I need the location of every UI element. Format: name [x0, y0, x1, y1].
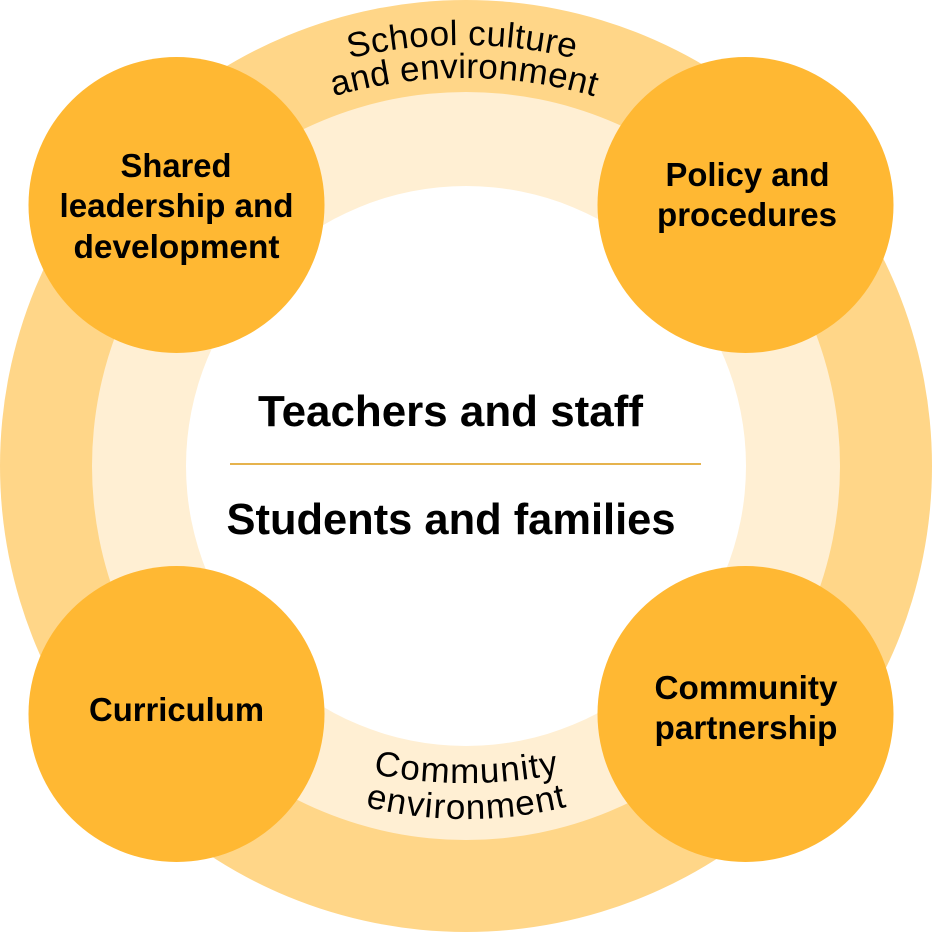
- middle ring label: Community: [376, 752, 556, 784]
- centre heading: teachers and staff: Teachers and staff: [258, 387, 643, 436]
- middle ring label: environment: [368, 786, 566, 820]
- circle: community partnership: Community: [654, 669, 838, 706]
- circle: curriculum: [28, 566, 324, 862]
- circle: policy and procedures: procedures: [657, 196, 837, 233]
- circle: community partnership: partnership: [654, 709, 838, 746]
- outer ring label: School culture: [348, 20, 576, 57]
- circle: policy and procedures: Policy and: [666, 156, 830, 193]
- circle: community partnership: [598, 566, 894, 862]
- middle ring label: [368, 752, 566, 820]
- circle: shared leadership and development: Shared: [120, 147, 232, 184]
- centre heading: students and families: Students and families: [226, 495, 676, 544]
- outer ring label: and environment: [332, 52, 599, 96]
- outer ring label: [332, 20, 599, 96]
- circle: shared leadership and development: leadership and: [60, 187, 294, 224]
- circle: curriculum: Curriculum: [89, 691, 264, 728]
- middle ring: community environment: [92, 92, 840, 840]
- circle: shared leadership and development: development: [74, 228, 280, 265]
- inner circle: centre: [186, 186, 746, 746]
- circle: shared leadership and development: [28, 57, 324, 353]
- circle: policy and procedures: [598, 57, 894, 353]
